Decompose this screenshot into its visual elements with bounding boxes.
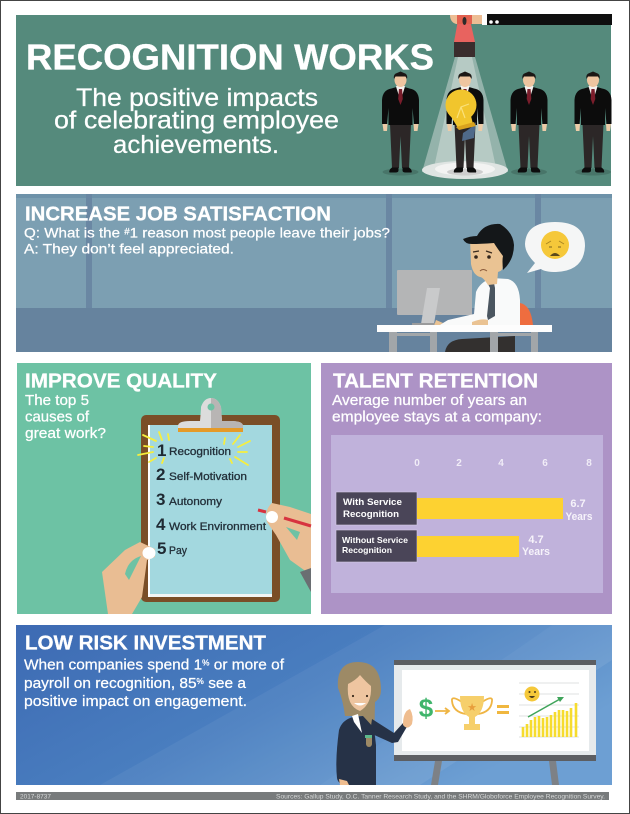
heading: TALENT RETENTION [333, 370, 538, 392]
axis labels [414, 458, 592, 469]
icon: trophy [452, 696, 492, 730]
list: top 5 causes: 4 [156, 515, 166, 534]
bar: without service recognition: Recognition [342, 545, 392, 555]
icon: arrow [435, 708, 449, 714]
text block: body: or more of [209, 656, 285, 674]
axis labels: 6 [542, 458, 548, 469]
axis labels: 2 [456, 458, 462, 469]
text block: intro [332, 393, 542, 426]
list: top 5 causes [156, 441, 266, 558]
text block: body: positive impact on engagement. [24, 693, 247, 710]
icon: highlight rays [138, 432, 250, 465]
subtitle [54, 84, 339, 159]
icon: speech bubble with sad face [525, 222, 585, 273]
icon: spotlight beam [422, 57, 508, 179]
bar: with service recognition: Recognition [343, 509, 399, 520]
bar: with service recognition: 6.7 [570, 498, 586, 510]
title: RECOGNITION WORKS [26, 36, 434, 78]
list: top 5 causes: Autonomy [169, 496, 223, 508]
text block: question and answer [24, 224, 390, 256]
list: top 5 causes: 2 [156, 465, 165, 484]
icon: left hand [102, 542, 156, 614]
list: top 5 causes: 1 [157, 441, 166, 460]
text block: body: % [202, 658, 209, 668]
text block: intro: great work? [25, 425, 106, 442]
list: top 5 causes: Recognition [169, 446, 231, 458]
bar: with service recognition: Years [566, 511, 592, 523]
panel: low risk investment [16, 625, 612, 785]
list: top 5 causes: Pay [169, 545, 187, 557]
icon: flashlight and hand [450, 14, 612, 57]
heading: IMPROVE QUALITY [25, 370, 217, 392]
icon: businessman 4 [574, 72, 612, 176]
axis labels: 8 [586, 458, 592, 469]
bar: without service recognition: Years [522, 546, 550, 558]
subtitle: The positive impacts [76, 84, 318, 112]
subtitle: achievements. [113, 131, 279, 159]
list: top 5 causes: 5 [157, 539, 166, 558]
list: top 5 causes: 3 [156, 490, 165, 509]
text block: question and answer: Q: What is the [24, 224, 113, 240]
heading: LOW RISK INVESTMENT [25, 632, 266, 654]
text block: question and answer: # [124, 226, 130, 236]
text block: intro: employee stays at a company: [332, 410, 542, 426]
subtitle: of celebrating employee [54, 106, 339, 134]
footer bar: Sources: Gallup Study, O.C. Tanner Research Study, and the SHRM/Globoforce Employee Recognition Survey. [276, 794, 605, 800]
text block: body: When companies spend 1 [24, 656, 197, 674]
panel: increase job satisfaction [16, 194, 612, 352]
text block: intro: causes of [25, 408, 90, 426]
icon: presenter woman [336, 662, 413, 785]
text block: intro: Average number of years an [332, 393, 527, 409]
icon: trophy: ★ [467, 702, 477, 714]
axis labels: 4 [498, 458, 504, 469]
bar: with service recognition: With Service [343, 497, 402, 508]
text block: question and answer: 1 reason most people leave their jobs? [130, 224, 390, 240]
bar: without service recognition: 4.7 [528, 534, 544, 546]
list: top 5 causes: Work Environment [169, 521, 266, 533]
icon: presentation board [394, 660, 596, 785]
icon: clipboard [141, 398, 280, 602]
icon: dollar sign: $ [419, 693, 434, 723]
icon: businessman with light bulb [446, 72, 484, 176]
panel: talent retention [321, 363, 612, 614]
icon: equals sign [497, 706, 509, 712]
icon: sad worker at desk [377, 224, 552, 352]
text block: intro: The top 5 [25, 392, 89, 409]
panel: header [16, 14, 612, 186]
text block: body: see a [204, 675, 247, 692]
footer bar: 2017-8737 [20, 794, 52, 800]
footer bar [16, 792, 609, 800]
text block: body [24, 656, 285, 710]
text block: body: % [197, 677, 204, 686]
bar chart [331, 435, 603, 593]
bar: without service recognition: Without Service [342, 535, 408, 545]
chart: rising bars [519, 683, 579, 737]
text block: question and answer: A: They don’t feel appreciated. [24, 240, 234, 256]
bar: with service recognition [336, 492, 592, 525]
icon: businessman 1 [382, 72, 419, 176]
icon: businessman 3 [510, 72, 548, 176]
text block: body: payroll on recognition, 85 [24, 675, 192, 692]
axis labels: 0 [414, 458, 420, 469]
panel: improve quality [17, 363, 311, 614]
text block: intro [25, 392, 106, 442]
icon: right hand with pencil [258, 503, 311, 592]
list: top 5 causes: Self-Motivation [169, 471, 247, 483]
heading: INCREASE JOB SATISFACTION [25, 202, 331, 226]
bar: without service recognition [336, 530, 550, 562]
